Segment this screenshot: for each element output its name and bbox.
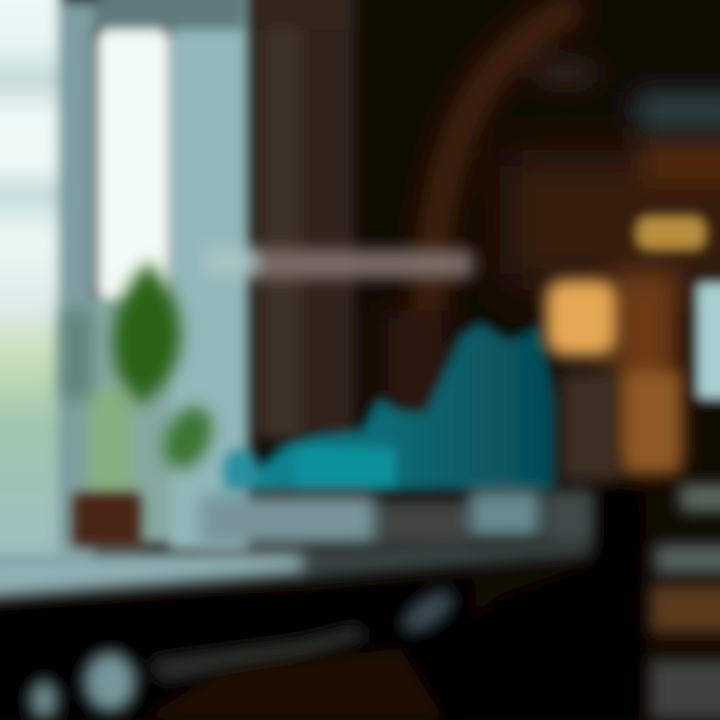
right screen [696, 282, 720, 400]
table lamp [546, 280, 618, 482]
plant [60, 262, 222, 495]
lower reflections [30, 583, 461, 720]
wooden arch [380, 4, 720, 470]
window [0, 0, 248, 560]
chair [140, 490, 640, 720]
pale chart base [200, 490, 595, 548]
curtain [250, 0, 355, 440]
blurred title bar [205, 248, 473, 278]
desk top [0, 540, 590, 602]
right lower shelves [625, 372, 720, 720]
flower pot [72, 492, 142, 550]
ceiling lamp [636, 216, 706, 250]
teal area chart [222, 322, 556, 492]
desk underside [0, 578, 470, 720]
